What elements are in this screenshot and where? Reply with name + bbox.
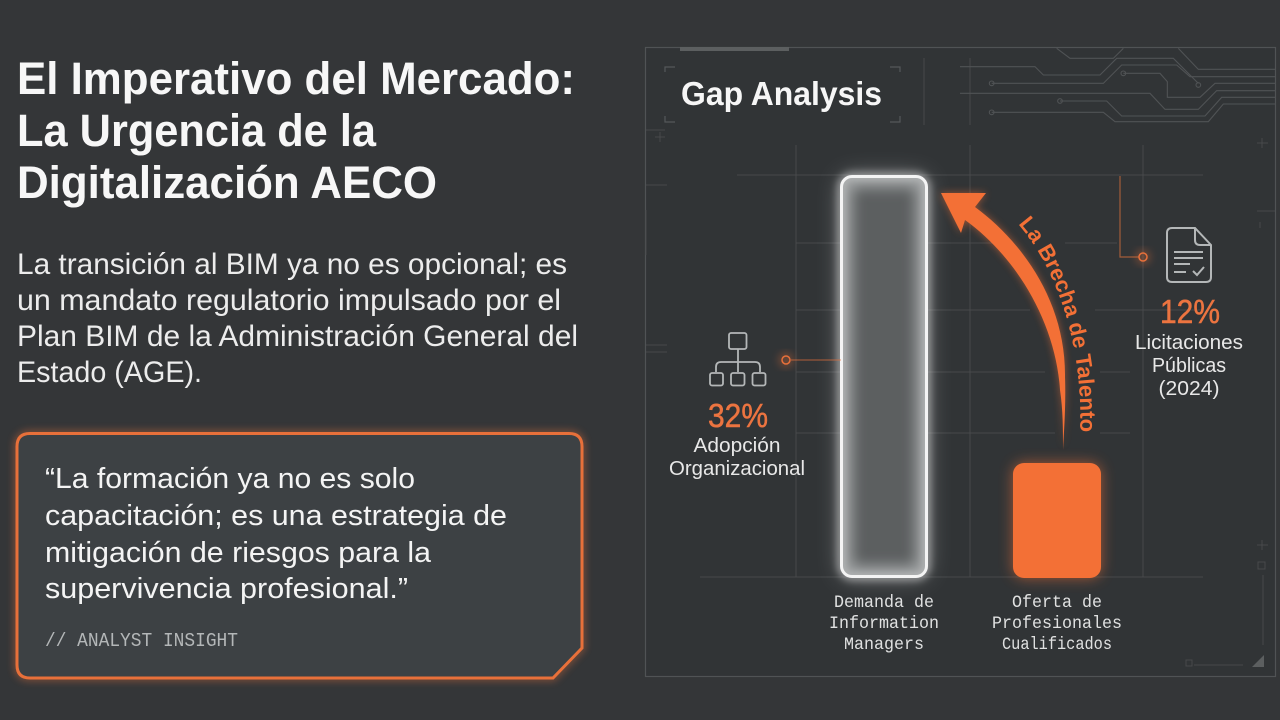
- title: La Urgencia de la: [17, 105, 377, 156]
- bar label: demand: Information: [829, 614, 939, 634]
- title: Digitalización AECO: [17, 157, 437, 208]
- quote text: capacitación; es una estrategia de: [45, 500, 507, 532]
- bar label: supply: [992, 593, 1122, 655]
- quote attribution: // ANALYST INSIGHT: [45, 630, 238, 652]
- intro paragraph: un mandato regulatorio impulsado por el: [17, 284, 561, 317]
- stat: public tenders: [1135, 228, 1243, 400]
- quote text: supervivencia profesional.”: [45, 573, 408, 605]
- stat: organizational adoption: Organizacional: [669, 457, 805, 480]
- title: [17, 53, 575, 208]
- stat: public tenders: Licitaciones: [1135, 331, 1243, 354]
- panel heading: Gap Analysis: [665, 67, 900, 122]
- stat: public tenders: Públicas: [1152, 354, 1226, 377]
- panel: left column text: [17, 53, 578, 389]
- bar: supply of qualified professionals: [1013, 463, 1101, 578]
- bar: demand for information managers: [841, 176, 927, 577]
- intro paragraph: [17, 248, 578, 389]
- stat: public tenders: (2024): [1158, 377, 1220, 400]
- intro paragraph: Estado (AGE).: [17, 356, 202, 389]
- title: El Imperativo del Mercado:: [17, 53, 575, 104]
- arrow label: La Brecha de Talento: [1019, 216, 1095, 432]
- stat: public tenders: 12%: [1160, 293, 1220, 330]
- connector: left stat: [778, 352, 841, 368]
- intro paragraph: Plan BIM de la Administración General del: [17, 320, 578, 353]
- panel: gap analysis chart: [645, 47, 1276, 677]
- bar label: demand: Managers: [844, 635, 924, 655]
- bar label: supply: Oferta de: [1012, 593, 1102, 613]
- stat: organizational adoption: 32%: [708, 397, 768, 434]
- panel heading: Gap Analysis: Gap Analysis: [681, 75, 882, 112]
- circuit traces: [960, 48, 1275, 122]
- arrow: talent gap: [941, 193, 1065, 450]
- intro paragraph: La transición al BIM ya no es opcional; es: [17, 248, 567, 281]
- bar label: demand: Demanda de: [834, 593, 934, 613]
- stat: organizational adoption: [669, 333, 805, 480]
- bar label: supply: Profesionales: [992, 614, 1122, 634]
- bar label: supply: Cualificados: [1002, 635, 1112, 655]
- callout: analyst quote: [17, 434, 582, 678]
- quote text: “La formación ya no es solo: [45, 463, 415, 495]
- bar label: demand: [829, 593, 939, 655]
- stat: organizational adoption: Adopción: [694, 434, 780, 457]
- connector: right stat: [1120, 176, 1151, 265]
- quote text: [45, 463, 507, 605]
- icon: org chart: [710, 333, 766, 386]
- quote text: mitigación de riesgos para la: [45, 537, 432, 569]
- icon: document with check: [1167, 228, 1211, 282]
